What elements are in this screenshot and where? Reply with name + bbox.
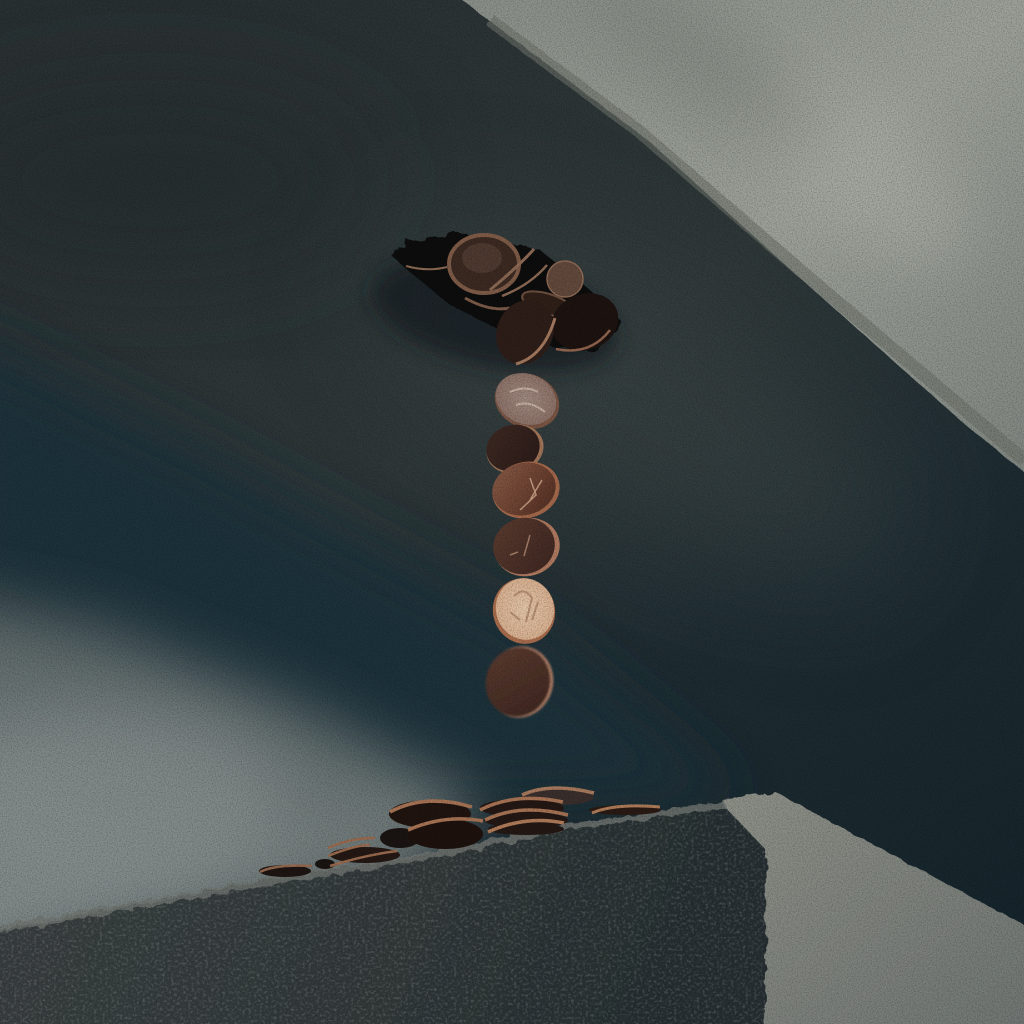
block speckle bbox=[0, 790, 770, 1024]
pile of coins on the ledge bbox=[259, 788, 661, 877]
right coins bbox=[589, 805, 661, 815]
falling coin column bbox=[477, 364, 568, 726]
coin 6 bbox=[477, 638, 563, 726]
lower-left lit concrete bbox=[0, 590, 480, 980]
blue shadow fold at left bbox=[0, 320, 740, 810]
block front face bbox=[0, 804, 766, 1024]
upper-right light concrete slab bbox=[462, 0, 1024, 505]
coin 1 bbox=[486, 364, 568, 438]
coin 5 bbox=[484, 570, 564, 652]
single coin left bbox=[259, 865, 311, 877]
block top edge bbox=[0, 804, 725, 936]
hole in the concrete ceiling bbox=[392, 232, 622, 352]
block side face bbox=[722, 792, 1024, 1024]
small stack bbox=[330, 847, 400, 863]
chipped slab edge bbox=[490, 20, 1024, 460]
shadow recess around hole bbox=[362, 238, 628, 392]
coin 2 bbox=[480, 417, 550, 481]
coins emerging from the hole bbox=[406, 235, 627, 374]
foreground concrete block bbox=[0, 790, 1024, 1024]
large coins bbox=[389, 800, 471, 828]
coin 4 bbox=[487, 510, 566, 584]
coin 3 bbox=[486, 454, 566, 526]
central stack bbox=[480, 799, 564, 817]
